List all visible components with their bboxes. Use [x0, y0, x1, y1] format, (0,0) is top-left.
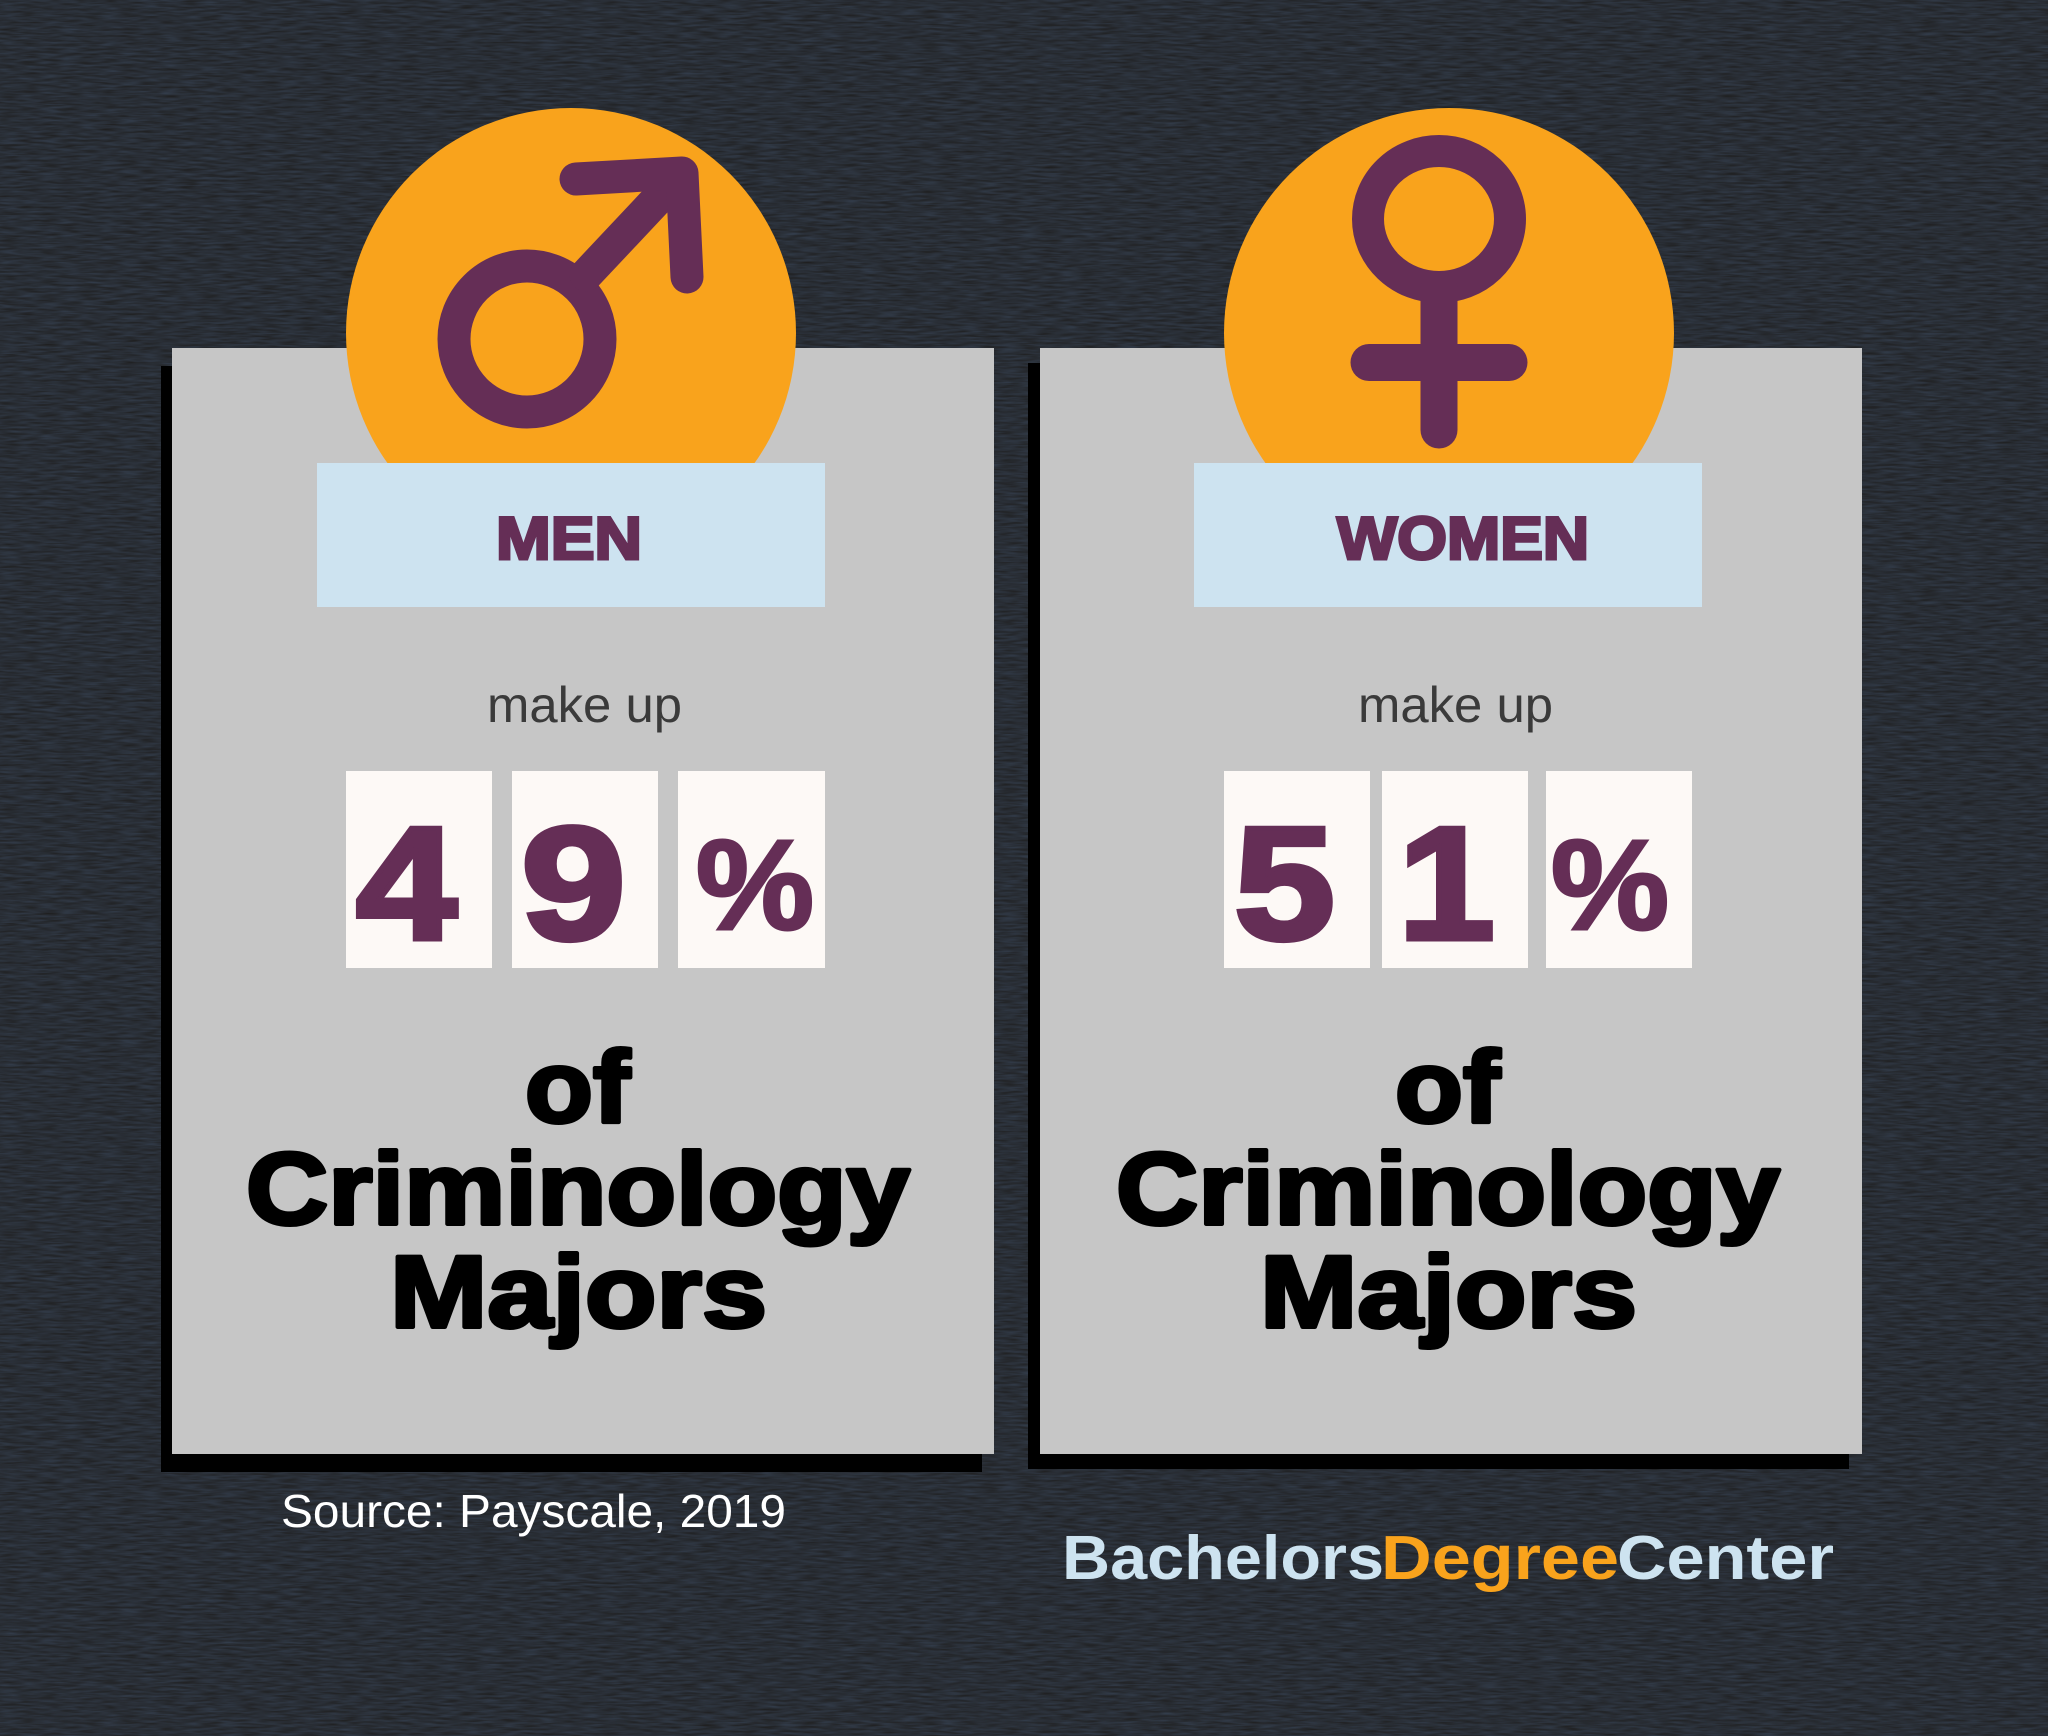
- text: make up: make up: [487, 677, 682, 733]
- text: of Criminology Majors: Criminology: [1116, 1132, 1780, 1246]
- stat: 51 percent: 1: [1398, 794, 1495, 974]
- text: of Criminology Majors: of: [525, 1030, 631, 1144]
- stat: 49 percent: 9: [521, 794, 626, 974]
- logo: BachelorsDegreeCenter: Bachelors: [1062, 1524, 1384, 1593]
- stat: 51 percent: %: [1551, 814, 1669, 957]
- icon: female symbol: [1368, 151, 1510, 430]
- stat: 49 percent: %: [696, 814, 814, 957]
- text: of Criminology Majors: Majors: [390, 1235, 767, 1349]
- text: of Criminology Majors: of: [1395, 1030, 1501, 1144]
- orange circle: women: [1224, 108, 1674, 558]
- label: men: [317, 463, 825, 607]
- logo: BachelorsDegreeCenter: Center: [1617, 1524, 1834, 1593]
- text: of Criminology Majors: Criminology: [246, 1132, 910, 1246]
- icon: male symbol: [454, 173, 687, 412]
- logo: BachelorsDegreeCenter: [1062, 1524, 1834, 1593]
- stat: 49 percent: [346, 771, 825, 974]
- stat: 51 percent: [1224, 771, 1692, 974]
- text: of Criminology Majors: [1116, 1030, 1780, 1349]
- text: of Criminology Majors: [246, 1030, 910, 1349]
- label: men: MEN: [496, 505, 642, 572]
- stat: 51 percent: 5: [1234, 794, 1335, 974]
- label: women: [1194, 463, 1702, 607]
- source note: Source: Payscale, 2019: [281, 1485, 786, 1537]
- orange circle: men: [346, 108, 796, 558]
- panel: men: [161, 108, 994, 1472]
- text: make up: make up: [1358, 677, 1553, 733]
- logo: BachelorsDegreeCenter: Degree: [1381, 1524, 1619, 1593]
- panel: women: [1028, 108, 1862, 1469]
- stat: 49 percent: 4: [356, 794, 457, 974]
- text: of Criminology Majors: Majors: [1260, 1235, 1637, 1349]
- label: women: WOMEN: [1337, 505, 1589, 572]
